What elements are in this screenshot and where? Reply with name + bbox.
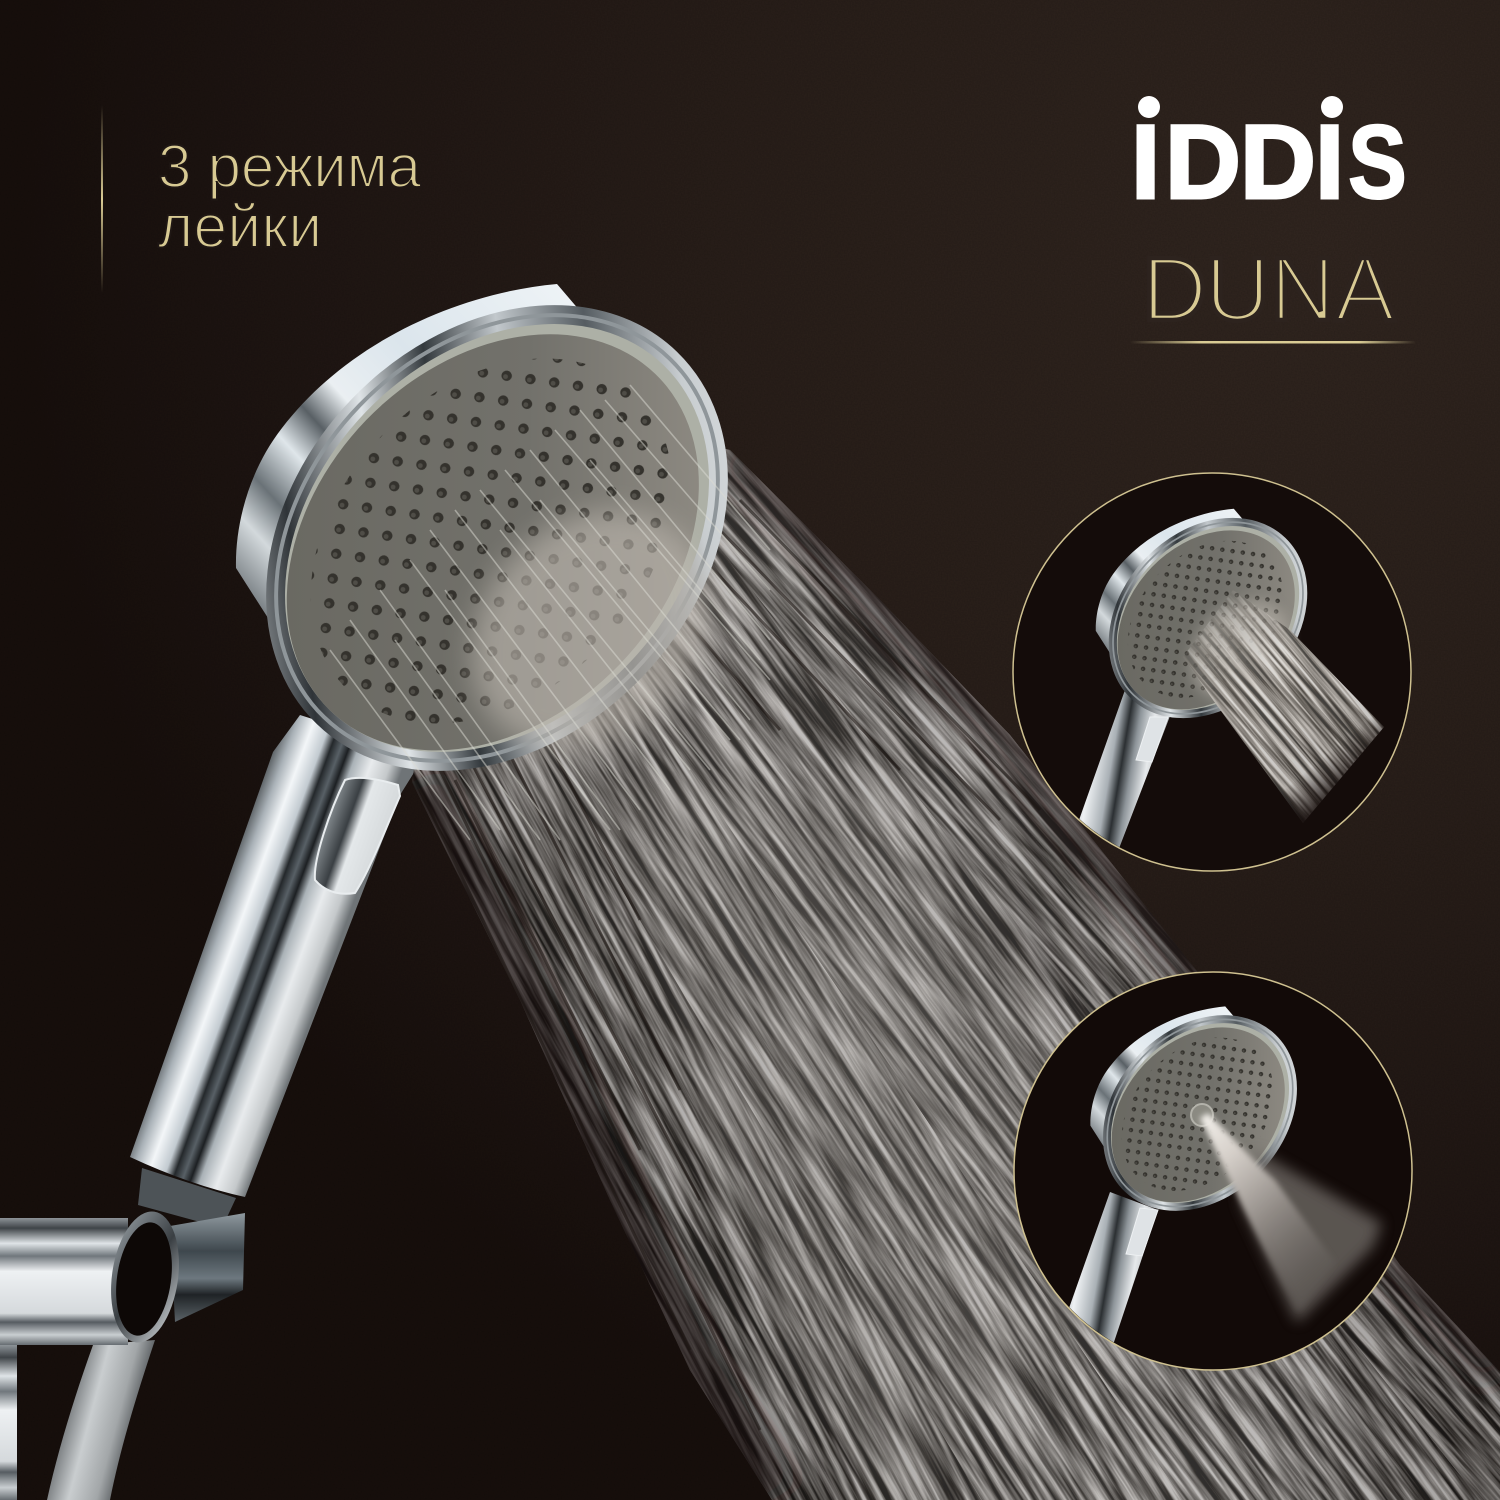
wall bracket	[0, 1207, 245, 1347]
logo: IDDIS: IDDI	[1131, 104, 1344, 221]
logo: IDDIS: S	[1348, 103, 1407, 221]
inset circle: massage mode	[1013, 473, 1411, 871]
heading: 3 режима лейки: лейки	[158, 193, 322, 260]
shower hose	[47, 1340, 155, 1500]
heading: 3 режима лейки	[158, 133, 422, 260]
inset spray	[1183, 590, 1384, 823]
handle collar	[138, 1168, 236, 1228]
jet spray core	[1200, 1113, 1335, 1312]
main water spray	[412, 449, 1500, 1500]
water film on head face	[424, 464, 756, 796]
shower handle	[130, 715, 425, 1228]
inset head	[1090, 1006, 1297, 1211]
darkened left spray edge	[412, 782, 772, 1500]
mode switch button	[315, 778, 400, 894]
gold vertical divider	[101, 105, 103, 293]
inset handle	[1069, 1192, 1156, 1342]
darkened right spray edge	[730, 450, 1500, 1372]
main shower head	[178, 218, 816, 858]
inset face water film	[1184, 594, 1290, 702]
inset head	[1096, 508, 1308, 718]
dark gaps at spray edges	[420, 500, 1040, 1430]
heading: 3 режима лейки: 3 режима	[158, 133, 422, 200]
inset circle: jet mode	[1014, 972, 1412, 1370]
inset handle	[1079, 692, 1170, 847]
inset switch button	[1136, 717, 1168, 762]
gold underline	[1130, 341, 1416, 344]
water jets over face	[330, 385, 770, 840]
inset switch button	[1126, 1208, 1158, 1256]
jet nozzle	[1191, 1104, 1213, 1126]
bracket cap	[109, 1219, 179, 1339]
jet spray fan	[1240, 1150, 1382, 1323]
hose fitting	[0, 1345, 17, 1500]
product name: DUNA: DUNA	[1142, 240, 1395, 340]
soft spray core	[633, 782, 1068, 1472]
